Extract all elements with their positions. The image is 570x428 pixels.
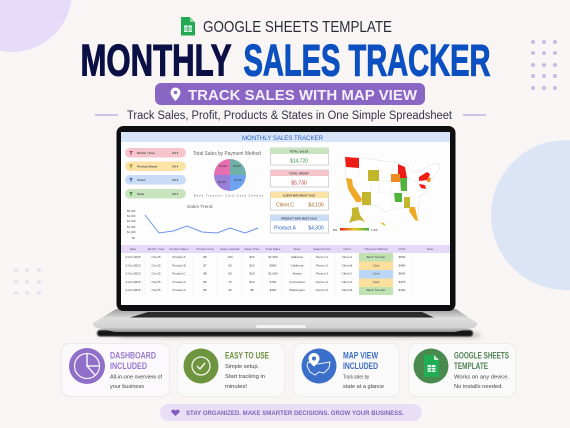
data table: Person 5 <box>316 288 328 292</box>
data table: $375 <box>399 280 406 284</box>
kpi cards: TOTAL PROFIT <box>289 172 309 176</box>
card: easy to use: Start tracking in <box>225 374 265 380</box>
footer banner <box>160 404 422 421</box>
data table: $750 <box>270 280 277 284</box>
data table: $10 <box>249 280 255 284</box>
data table: $7 <box>203 264 207 268</box>
screen <box>121 132 450 305</box>
filter pills: Client <box>137 178 145 182</box>
data table: Cash <box>372 272 380 276</box>
icon: sheets file <box>414 348 448 384</box>
data table: Client B <box>342 288 352 292</box>
kpi cards: CLIENT WITH MOST SALE <box>283 194 316 198</box>
data table: $15 <box>249 255 255 259</box>
line chart: sales trend <box>127 204 258 240</box>
card: dashboard included: your business <box>110 384 144 390</box>
data table: 60 <box>228 264 232 268</box>
data table: Alabama <box>291 255 303 259</box>
card: google sheets template: No installs needed. <box>454 384 503 390</box>
data table: Bank Transfer <box>367 255 385 259</box>
data table: Product A <box>172 288 186 292</box>
data table: 100 <box>227 255 233 259</box>
banner: track sales with map view: TRACK SALES WITH MAP VIEW <box>188 87 418 104</box>
line chart: sales trend: $2,000 <box>127 225 136 229</box>
kpi cards: $14,720 <box>290 158 308 164</box>
data table: Product B <box>172 264 186 268</box>
data table: 3-Oct-2025 <box>125 272 141 276</box>
kpi cards: PRODUCT WITH MOST SALE <box>281 216 317 220</box>
data table: Product Name <box>169 247 189 251</box>
pie chart: $3,500 <box>233 165 241 168</box>
data table: Oct-25 <box>151 255 161 259</box>
filter pills: All ▾ <box>172 151 179 155</box>
filter pills: All ▾ <box>172 192 179 196</box>
pie chart: Bank Transfer Card Cash Cheque <box>194 194 263 198</box>
data table: $8 <box>203 272 207 276</box>
pie chart: $4,100 <box>234 179 242 182</box>
data table: Oct-25 <box>151 288 161 292</box>
line chart: sales trend: $3,000 <box>127 219 136 223</box>
heat map of US states: 1,200 <box>371 229 378 232</box>
data table: Washington <box>289 288 305 292</box>
data table <box>121 245 450 295</box>
pie chart: $3,600 <box>218 181 226 184</box>
icon: google sheets <box>181 17 195 36</box>
data table: 4-Oct-2025 <box>125 288 141 292</box>
card: dashboard included: INCLUDED <box>110 361 147 371</box>
heat map of US states <box>333 157 440 232</box>
data table: $1,000 <box>268 272 278 276</box>
data table: $900 <box>270 264 277 268</box>
laptop underside <box>97 330 473 336</box>
title <box>80 36 490 86</box>
data table: State <box>293 247 301 251</box>
data table: California <box>291 264 304 268</box>
laptop bezel <box>116 126 456 311</box>
sheet title bar: MONTHLY SALES TRACKER <box>242 136 324 142</box>
card: google sheets template: GOOGLE SHEETS <box>454 350 509 360</box>
subtitle: Track Sales, Profit, Products & States in One Simple Spreadsheet <box>127 110 453 122</box>
filter pills: Product Name <box>137 164 158 168</box>
kpi cards: Product A <box>274 226 297 232</box>
data table: Client <box>343 247 351 251</box>
line chart: sales trend: $0 <box>132 236 136 240</box>
filter pills <box>125 148 186 198</box>
card: easy to use: minutes! <box>225 384 247 390</box>
card: dashboard included: DASHBOARD <box>110 350 156 360</box>
data table: Product Cost <box>196 247 214 251</box>
line chart: sales trend: Sales Trend <box>187 204 213 210</box>
data table: Connecticut <box>289 280 305 284</box>
card: map view included: INCLUDED <box>343 361 378 371</box>
banner: track sales with map view <box>155 83 425 105</box>
filter pills: State <box>137 192 145 196</box>
data table: $1,500 <box>268 255 278 259</box>
card: map view included <box>294 344 400 396</box>
payment method chips <box>359 253 393 295</box>
card: dashboard included <box>62 344 170 396</box>
sheet title bar <box>121 132 450 142</box>
data table: $480 <box>399 264 406 268</box>
data table: $8 <box>250 288 254 292</box>
data table: Sales Person <box>313 247 331 251</box>
data table: Person 1 <box>316 255 328 259</box>
data table: Bank Transfer <box>367 288 385 292</box>
data table: Client B <box>342 264 352 268</box>
data table: Sales Quantity <box>220 247 240 251</box>
card: easy to use: Simple setup. <box>225 364 259 370</box>
kpi cards: $4,300 <box>308 226 324 232</box>
data table: Sales Price <box>244 247 260 251</box>
data table: $100 <box>399 288 406 292</box>
kpi cards <box>270 148 328 233</box>
data table: $5 <box>203 255 207 259</box>
data table: Card <box>373 264 380 268</box>
laptop <box>93 126 480 338</box>
heat map of US states: $50 <box>333 229 338 232</box>
data table: Card <box>373 280 380 284</box>
data table: Client A <box>342 255 352 259</box>
card: map view included: Track sales by <box>343 374 369 380</box>
laptop base <box>93 309 477 332</box>
card: google sheets template: TEMPLATE <box>454 361 488 371</box>
pie chart: $3,520 <box>219 165 227 168</box>
data table: Client C <box>342 272 353 276</box>
data table: Client D <box>342 280 353 284</box>
eyebrow heading: GOOGLE SHEETS TEMPLATE <box>203 19 392 36</box>
data table: $20 <box>249 272 255 276</box>
data table: 3-Oct-2025 <box>125 280 141 284</box>
kpi cards: $5,730 <box>291 180 307 186</box>
data table: Oct-25 <box>151 264 161 268</box>
filter pills: Month / Year <box>137 151 156 155</box>
data table: Product A <box>172 280 186 284</box>
filter pills: All ▾ <box>172 178 179 182</box>
card: google sheets template <box>408 344 516 396</box>
icon: pie chart <box>69 348 105 384</box>
data table: Person 3 <box>316 272 328 276</box>
data table: Person 2 <box>316 264 328 268</box>
data table: $5 <box>203 280 207 284</box>
data table: Date <box>130 247 136 251</box>
pie chart <box>193 151 263 198</box>
card: easy to use: EASY TO USE <box>225 350 269 360</box>
data table: Total Sales <box>266 247 281 251</box>
data table: Person 4 <box>316 280 328 284</box>
data table: 30 <box>228 288 232 292</box>
line chart: sales trend: $4,000 <box>127 214 136 218</box>
card: easy to use <box>178 344 284 396</box>
line chart: sales trend: $1,000 <box>127 230 136 234</box>
kpi cards: TOTAL SALES <box>289 150 309 154</box>
data table: Profit <box>398 247 406 251</box>
data table: $5 <box>203 288 207 292</box>
card: map view included: MAP VIEW <box>343 350 378 360</box>
data table: 75 <box>228 280 232 284</box>
line chart: sales trend: $5,000 <box>127 209 136 213</box>
data table: Note <box>427 247 433 251</box>
data table: Alaska <box>292 272 302 276</box>
data table: 50 <box>228 272 232 276</box>
data table: Product A <box>172 255 186 259</box>
card: google sheets template: Works on any device. <box>454 374 509 380</box>
data table: Oct-25 <box>151 280 161 284</box>
data table: Oct-25 <box>151 272 161 276</box>
data table: 3-Oct-2025 <box>125 264 141 268</box>
kpi cards: Client C <box>276 202 294 208</box>
data table: Month / Year <box>148 247 164 251</box>
data table: 3-Oct-2025 <box>125 255 141 259</box>
data table: $600 <box>399 272 406 276</box>
title: MONTHLY <box>80 36 232 86</box>
data table: $500 <box>399 255 406 259</box>
data table: Product C <box>172 272 187 276</box>
data table: $15 <box>249 264 255 268</box>
pie chart: Total Sales by Payment Method <box>193 151 261 157</box>
icon: map pin <box>302 348 336 384</box>
card: map view included: state at a glance <box>343 384 384 390</box>
data table: Payment Method <box>365 247 388 251</box>
filter pills: All ▾ <box>172 164 179 168</box>
kpi cards: $4,100 <box>308 202 324 208</box>
card: dashboard included: All-in-one overview of <box>110 374 162 380</box>
data table: $400 <box>270 288 277 292</box>
icon: check <box>184 348 218 384</box>
footer banner: STAY ORGANIZED. MAKE SMARTER DECISIONS. GROW YOUR BUSINESS. <box>186 410 404 417</box>
